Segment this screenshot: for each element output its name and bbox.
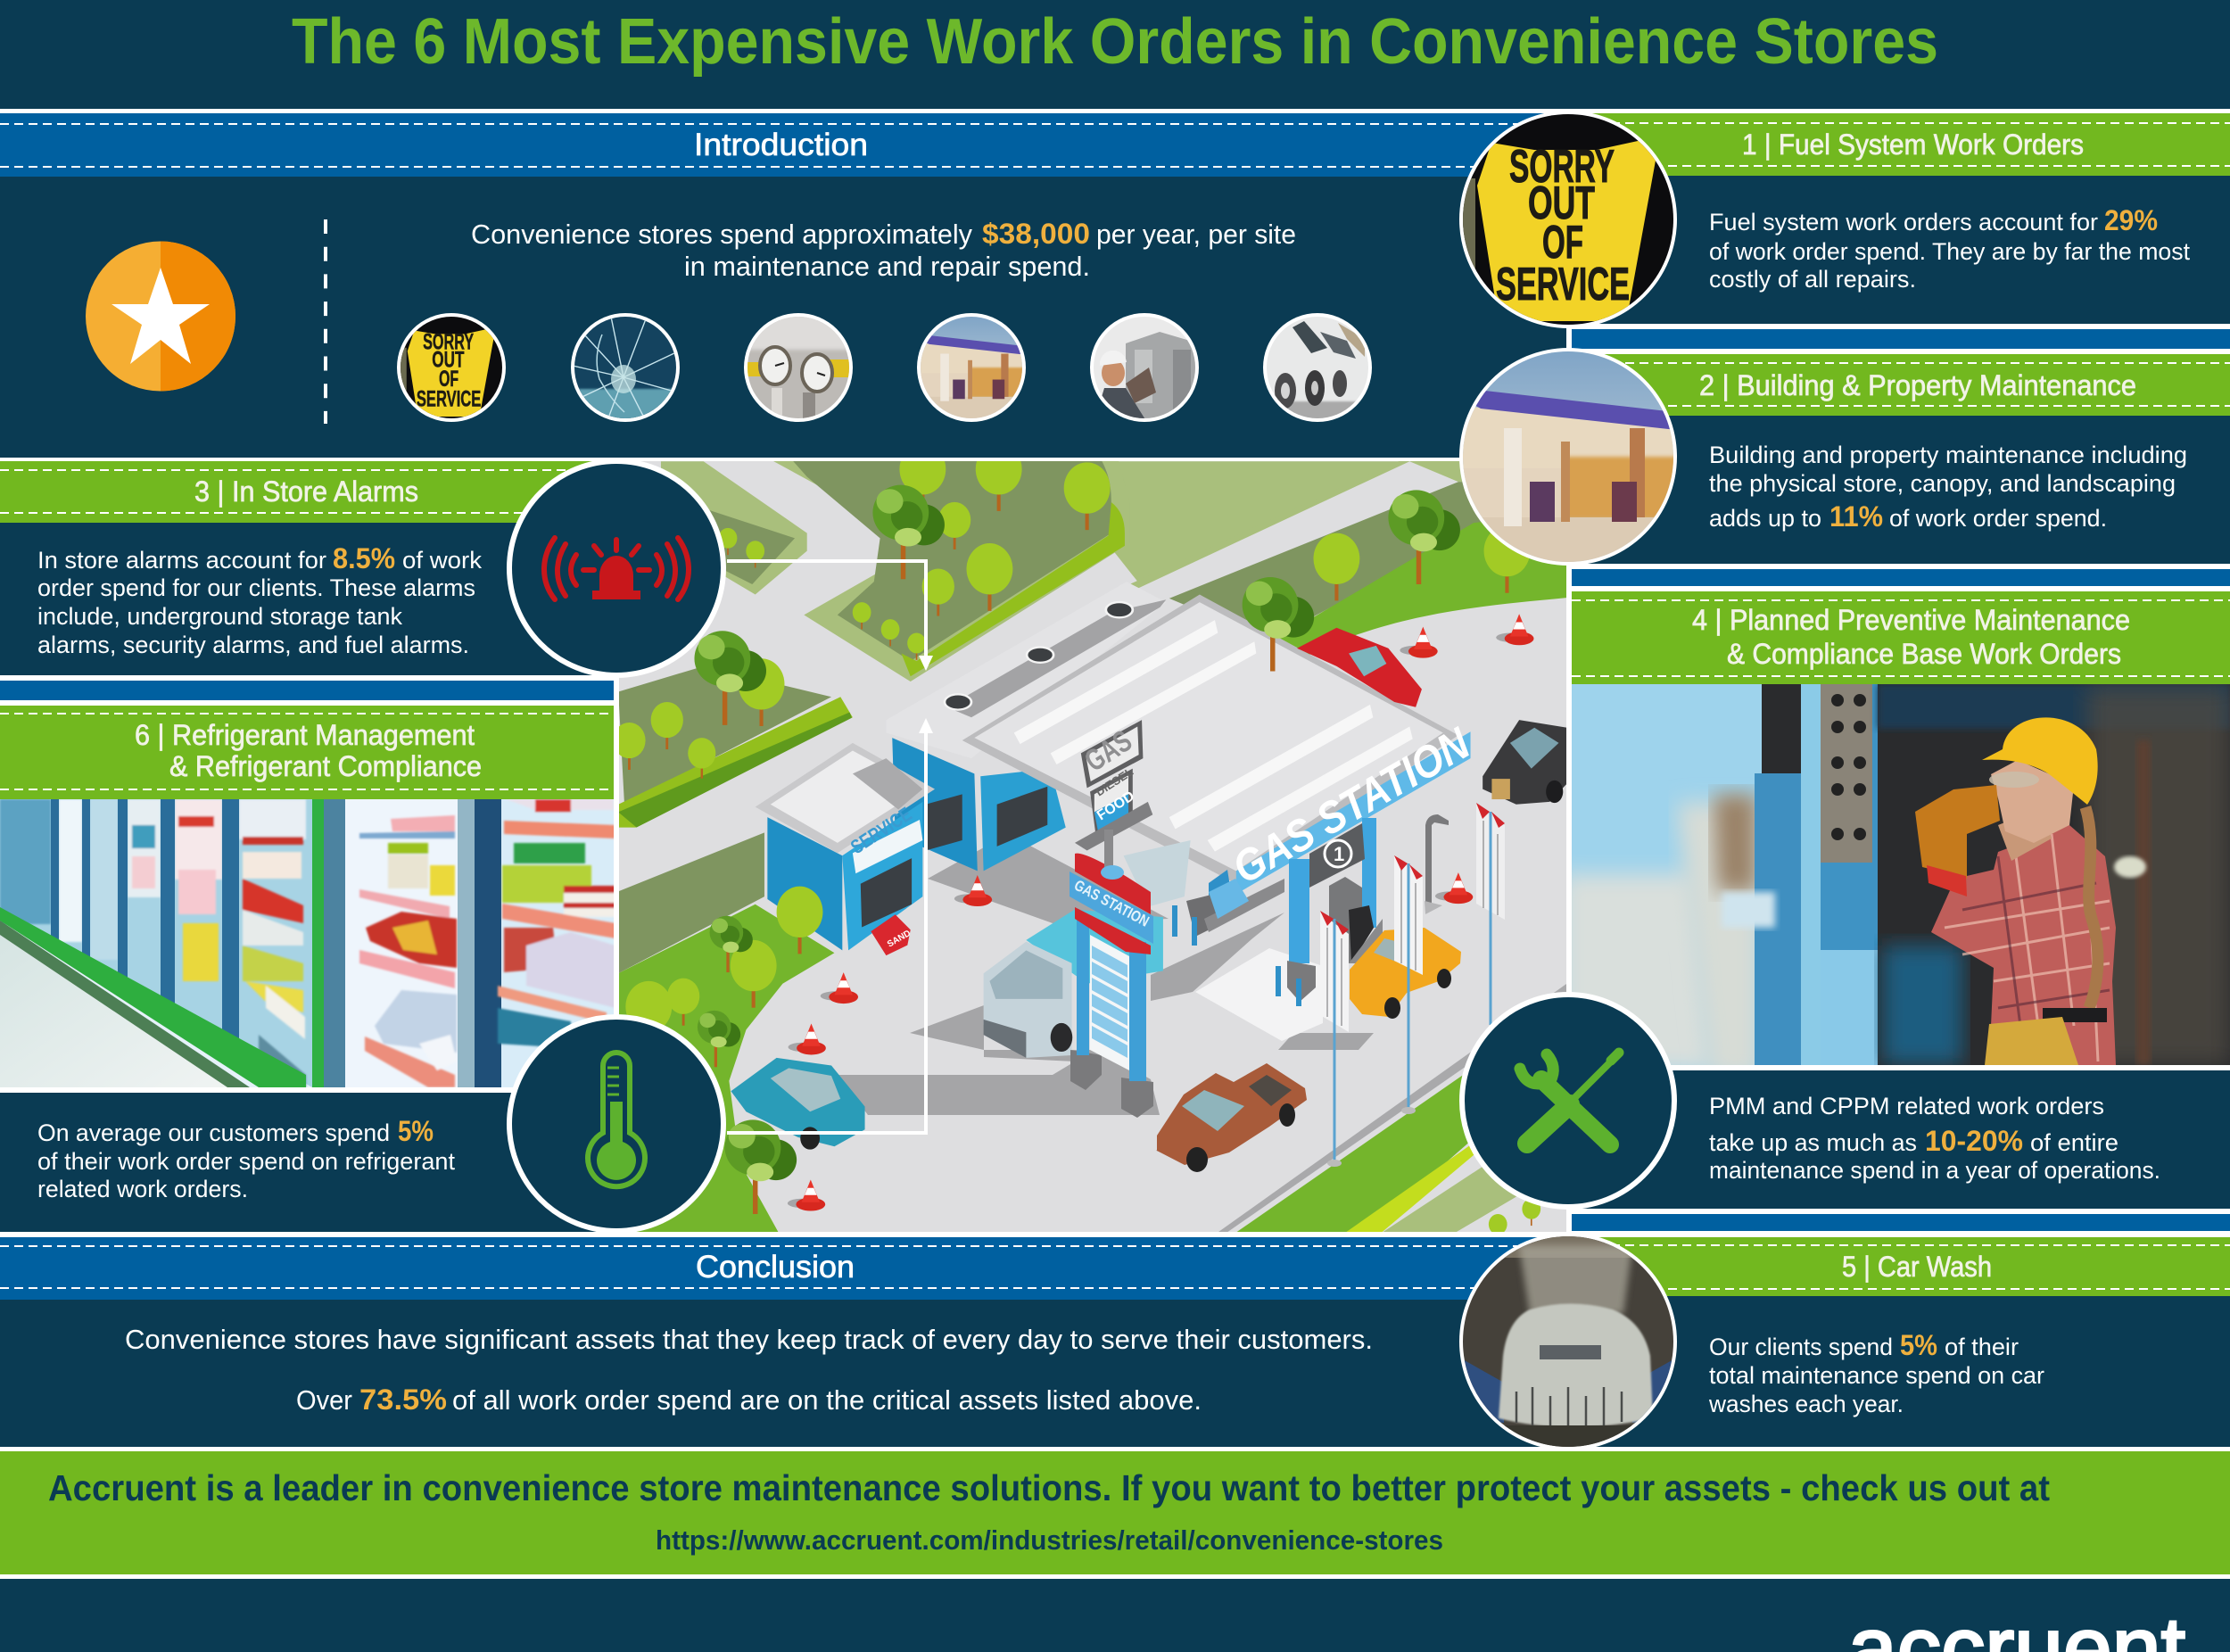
photo thumbnail: gas station canopy xyxy=(916,313,1028,423)
conclusion text: of all work order spend are on the critical assets listed above. xyxy=(452,1384,1202,1416)
text: fuel system: Fuel system work orders account for xyxy=(1709,209,2098,235)
text: alarms: of work xyxy=(402,547,483,574)
heading: 6 refrigerant xyxy=(135,719,482,782)
icon: red beacon xyxy=(544,538,689,599)
photo thumbnail: out of service: OF xyxy=(439,367,458,392)
intro text: Convenience stores spend approximately xyxy=(471,219,972,250)
panel: refrigerant management xyxy=(0,675,619,1202)
black car xyxy=(1483,720,1566,805)
photo thumbnail: out of service: OUT xyxy=(432,348,465,373)
text: fuel system xyxy=(1709,204,2190,293)
photo thumbnail: white vans xyxy=(1263,312,1372,424)
photo thumbnail: out of service xyxy=(396,313,508,425)
trees xyxy=(613,443,1540,1241)
text: car wash: of their xyxy=(1945,1334,2019,1360)
text: alarms: alarms, security alarms, and fuel alarms. xyxy=(37,632,469,658)
text: refrigerant: 5% xyxy=(398,1115,434,1147)
panel: planned preventive maintenance xyxy=(1561,564,2230,1236)
call to action headline: Accruent is a leader in convenience store maintenance solutions. If you want to better protect your assets - check us out at xyxy=(48,1467,2050,1508)
map sign text xyxy=(847,718,1479,950)
photo circle: out of service: SERVICE xyxy=(1496,259,1630,310)
text: alarms: In store alarms account for xyxy=(37,547,326,574)
panel: fuel system xyxy=(1568,113,2230,293)
photo: worker with hard hat xyxy=(1561,678,2230,1079)
text: fuel system: costly of all repairs. xyxy=(1709,266,1916,293)
heading: 4 planned preventive xyxy=(1692,604,2130,670)
text: PMM and CPPM xyxy=(1709,1093,2160,1184)
text: fuel system: of work order spend. They are by far the most xyxy=(1709,238,2190,265)
heading: 4 planned preventive: 4 | Planned Preventive Maintenance xyxy=(1692,604,2130,636)
shadows on plaza xyxy=(838,834,1374,1160)
photo thumbnail: pressure gauges xyxy=(740,312,856,424)
canopy roof xyxy=(962,594,1471,894)
store building xyxy=(886,582,1166,871)
map sign text: GAS STATION xyxy=(1224,718,1479,894)
heading: 3 in store alarms: 3 | In Store Alarms xyxy=(194,475,418,508)
text: PMM and CPPM: 10-20% xyxy=(1925,1125,2023,1157)
intro text: $38,000 xyxy=(982,218,1090,250)
conclusion text xyxy=(125,1324,1373,1416)
panel: call to action xyxy=(0,1447,2230,1579)
title: The 6 Most Expensive Work Orders in Convenience Stores xyxy=(292,6,1938,78)
panel: introduction xyxy=(0,113,1568,425)
heading: conclusion: Conclusion xyxy=(696,1250,855,1284)
red car xyxy=(1297,628,1422,707)
text: alarms: include, underground storage tank xyxy=(37,603,402,630)
map sign text: GAS STATION xyxy=(1071,877,1152,930)
roof fans xyxy=(945,602,1133,710)
text: alarms xyxy=(37,542,483,658)
pylon sign xyxy=(1070,830,1153,1118)
icon: star badge xyxy=(86,241,235,391)
conclusion text: Convenience stores have significant assets that they keep track of every day to serve their customers. xyxy=(125,1324,1373,1355)
map sign text: DIESEL xyxy=(1093,764,1136,799)
illustration: isometric gas station map xyxy=(613,443,1574,1241)
text: building: the physical store, canopy, and landscaping xyxy=(1709,470,2176,497)
intro text: per year, per site xyxy=(1096,219,1296,250)
map sign text: SERVICE xyxy=(847,803,915,858)
icon: thermometer xyxy=(588,1053,645,1186)
photo thumbnail: out of service: SERVICE xyxy=(417,386,481,411)
traffic cones xyxy=(788,614,1534,1211)
flags xyxy=(1320,803,1505,1167)
text: car wash: Our clients spend xyxy=(1709,1334,1893,1360)
panel: building and property xyxy=(1566,324,2230,533)
text: PMM and CPPM: take up as much as xyxy=(1709,1129,1917,1156)
fuel pumps and canopy columns xyxy=(1172,814,1449,1006)
text: building xyxy=(1709,442,2187,533)
photo circle: out of service: OF xyxy=(1542,217,1583,268)
text: car wash: 5% xyxy=(1900,1329,1937,1361)
arrow: alarms to store xyxy=(727,561,933,671)
photo thumbnail: out of service: SORRY xyxy=(423,330,474,355)
heading: introduction: Introduction xyxy=(694,128,868,162)
text: building: 11% xyxy=(1829,500,1883,533)
text: building: adds up to xyxy=(1709,505,1821,532)
icon: wrench and screwdriver xyxy=(1520,1053,1619,1144)
photo circle: gas station canopy xyxy=(1454,348,1686,571)
conclusion text: Over xyxy=(296,1384,352,1416)
heading: 4 planned preventive: & Compliance Base Work Orders xyxy=(1727,638,2121,670)
arrow: refrigerant to store xyxy=(727,718,933,1133)
text: building: of work order spend. xyxy=(1889,505,2107,532)
photo thumbnail: broken glass xyxy=(571,312,680,423)
photo circle: out of service: OUT xyxy=(1528,178,1595,229)
orange car xyxy=(1350,928,1461,1019)
service building xyxy=(756,743,935,955)
text: refrigerant xyxy=(37,1115,455,1202)
heading: 5 car wash: 5 | Car Wash xyxy=(1842,1251,1992,1283)
panel: conclusion xyxy=(0,1232,2230,1416)
gas sign xyxy=(1075,720,1152,850)
icon: tools circle xyxy=(1462,995,1674,1207)
buildings and vehicles xyxy=(613,443,1566,1241)
ground: parks and lawns xyxy=(618,456,1574,1235)
photo circle: out of service: SORRY xyxy=(1509,141,1615,193)
photo circle: car wash xyxy=(1454,1231,1686,1454)
text: alarms: order spend for our clients. These alarms xyxy=(37,574,475,601)
text: refrigerant: related work orders. xyxy=(37,1176,248,1202)
forecourt pad xyxy=(1195,948,1323,1041)
text: refrigerant: of their work order spend on refrigerant xyxy=(37,1148,455,1175)
text: refrigerant: On average our customers spend xyxy=(37,1119,390,1146)
brown pickup xyxy=(1157,1063,1307,1172)
text: building: Building and property maintenance including xyxy=(1709,442,2187,468)
url: https://www.accruent.com/industries/retail/convenience-stores xyxy=(656,1524,1443,1556)
heading: 6 refrigerant: & Refrigerant Compliance xyxy=(169,750,482,782)
heading: 1 fuel system: 1 | Fuel System Work Orders xyxy=(1742,128,2084,161)
photo thumbnail: technician xyxy=(1090,312,1199,424)
intro text xyxy=(471,218,1296,282)
text: PMM and CPPM: PMM and CPPM related work orders xyxy=(1709,1093,2104,1119)
text: car wash: washes each year. xyxy=(1708,1391,1904,1417)
panel: car wash xyxy=(1568,1237,2230,1417)
intro text: in maintenance and repair spend. xyxy=(684,251,1090,282)
map sign text: 1 xyxy=(1334,843,1344,865)
heading: 2 building: 2 | Building & Property Maintenance xyxy=(1699,369,2136,401)
text: car wash: total maintenance spend on car xyxy=(1709,1362,2044,1389)
text: PMM and CPPM: maintenance spend in a year of operations. xyxy=(1709,1157,2160,1184)
teal car xyxy=(731,1058,865,1150)
truck xyxy=(984,840,1191,1058)
heading: 6 refrigerant: 6 | Refrigerant Management xyxy=(135,719,475,751)
map sign text: SAND xyxy=(886,929,913,950)
text: alarms: 8.5% xyxy=(333,542,395,574)
photo: refrigerated aisle xyxy=(0,798,615,1088)
panel: in store alarms xyxy=(0,458,1566,658)
conclusion text: 73.5% xyxy=(359,1384,447,1416)
photo circle: out of service xyxy=(1454,107,1686,339)
icon: thermometer circle xyxy=(509,1017,723,1231)
text: PMM and CPPM: of entire xyxy=(2030,1129,2118,1156)
text: fuel system: 29% xyxy=(2104,204,2158,236)
map sign text: FOOD xyxy=(1094,789,1137,823)
text: car wash xyxy=(1708,1329,2044,1417)
map sign text: GAS xyxy=(1079,723,1138,779)
icon: alarm circle xyxy=(509,461,723,675)
